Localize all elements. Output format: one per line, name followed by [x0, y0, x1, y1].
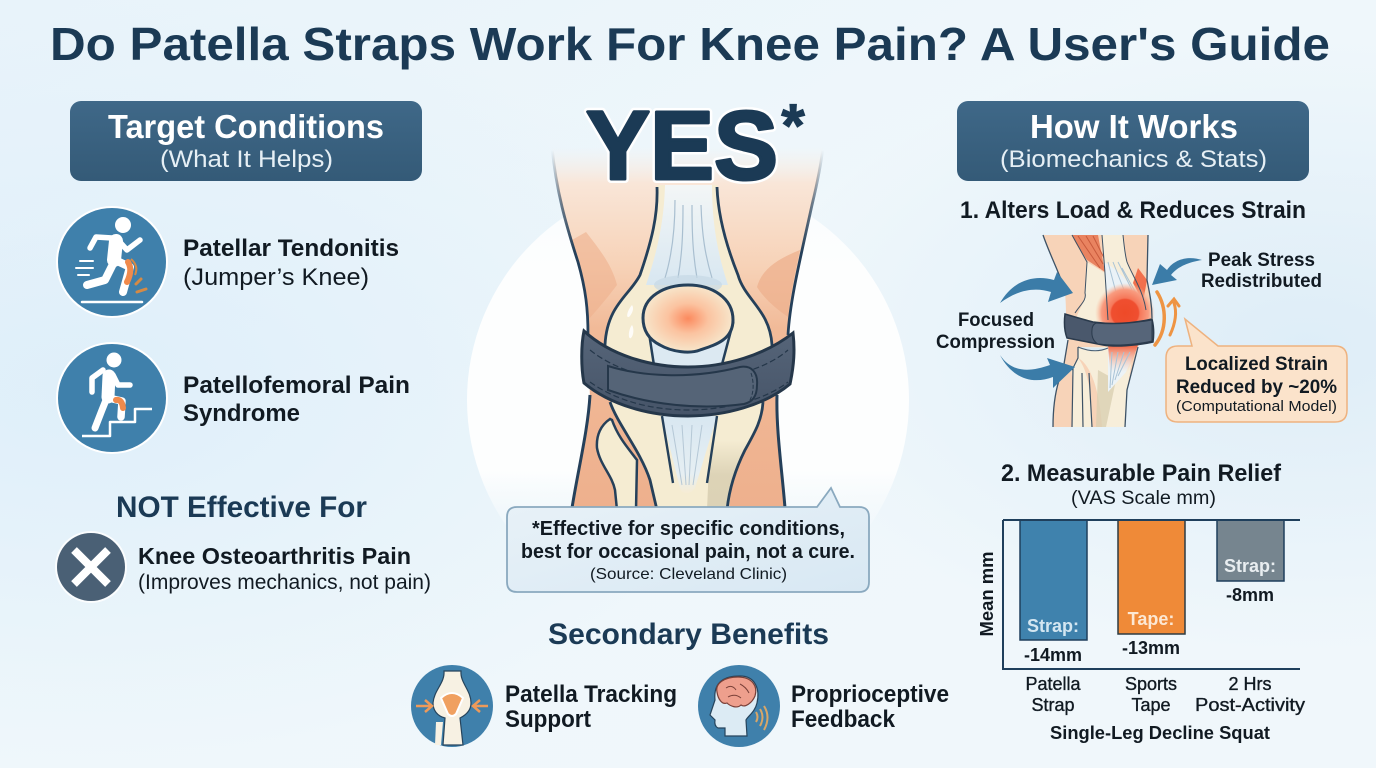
text: patellofemoral pain syndrome [183, 372, 410, 427]
patella [643, 285, 733, 352]
patellar tendon upper [647, 320, 733, 372]
text: patellar tendonitis: (Jumper’s Knee) [183, 264, 369, 291]
heading: secondary benefits: Secondary Benefits [548, 618, 829, 651]
panel: central knee illustration [467, 147, 909, 621]
axis label: Mean mm [977, 552, 997, 636]
text: patellar tendonitis [183, 235, 399, 291]
axis labels: Strap [1031, 695, 1075, 715]
label: focused compression: Compression [936, 332, 1055, 353]
text: patellofemoral pain syndrome: Patellofemoral Pain [183, 372, 410, 399]
bar chart [977, 520, 1305, 743]
bar: post activity: Strap: [1224, 556, 1276, 576]
axis labels: Patella [1025, 674, 1082, 694]
icon: x mark [55, 531, 127, 603]
bar: patella strap: -14mm [1024, 645, 1082, 665]
callout: effectiveness note: best for occasional pain, not a cure. [521, 541, 855, 563]
axis labels [1025, 674, 1305, 715]
yes heading: YES [586, 91, 778, 200]
bar: post activity [1217, 520, 1284, 605]
arrow: upper compression [1000, 272, 1073, 303]
heading: alters load: 1. Alters Load & Reduces Strain [960, 197, 1306, 224]
panel: target conditions [55, 101, 431, 603]
text: knee osteoarthritis pain: (Improves mechanics, not pain) [138, 571, 431, 594]
bar: sports tape: -13mm [1122, 638, 1180, 658]
callout: effectiveness note: (Source: Cleveland Clinic) [590, 566, 787, 583]
label: focused compression [936, 310, 1055, 353]
callout: localized strain [1166, 319, 1347, 422]
yes heading: YES [586, 91, 778, 200]
heading: how it works: (Biomechanics & Stats) [1000, 146, 1267, 173]
highlights [627, 305, 633, 338]
bar: patella strap: Strap: [1027, 616, 1079, 636]
label: focused compression: Focused [958, 310, 1034, 331]
heading: measurable pain relief: (VAS Scale mm) [1071, 488, 1216, 509]
text: proprioceptive feedback [791, 681, 949, 733]
side knee illustration [1043, 235, 1155, 427]
text: patellar tendonitis: Patellar Tendonitis [183, 235, 399, 262]
heading: target conditions [70, 101, 422, 181]
chart caption: Single-Leg Decline Squat [1050, 723, 1270, 743]
text: patella tracking support: Patella Tracking [505, 681, 677, 708]
heading: target conditions: Target Conditions [108, 108, 384, 145]
title: Do Patella Straps Work For Knee Pain? A User's Guide [50, 18, 1330, 70]
callout: effectiveness note: *Effective for specific conditions, [532, 518, 845, 540]
panel: how it works [936, 101, 1347, 743]
text: proprioceptive feedback: Feedback [791, 706, 896, 733]
label: peak stress: Peak Stress [1208, 250, 1315, 271]
callout: localized strain: Localized Strain [1185, 354, 1328, 375]
femur [605, 185, 772, 372]
leg skin [552, 147, 823, 510]
bar: post activity: -8mm [1226, 585, 1274, 605]
quadriceps tendon [646, 185, 728, 285]
arrow: peak stress [1152, 258, 1202, 285]
callout: localized strain: Reduced by ~20% [1176, 377, 1337, 398]
label: peak stress [1201, 250, 1322, 292]
text: patella tracking support [505, 681, 677, 733]
axis labels: Tape [1131, 695, 1171, 715]
panel: secondary benefits [411, 618, 949, 747]
text: knee osteoarthritis pain: Knee Osteoarthritis Pain [138, 543, 411, 569]
text: patellofemoral pain syndrome: Syndrome [183, 400, 300, 427]
heading: not effective for: NOT Effective For [116, 491, 367, 524]
heading: measurable pain relief [1001, 460, 1282, 509]
callout: localized strain: (Computational Model) [1176, 398, 1337, 415]
axis labels: Sports [1125, 674, 1177, 694]
icon: stair climber [56, 342, 168, 454]
axis labels: 2 Hrs [1228, 674, 1272, 694]
yes heading: * [781, 92, 805, 159]
text: knee osteoarthritis pain [138, 543, 431, 594]
text: patella tracking support: Support [505, 706, 591, 733]
heading: target conditions: (What It Helps) [160, 146, 333, 173]
bar: patella strap [1020, 520, 1087, 665]
bar: sports tape: Tape: [1128, 609, 1174, 629]
label: peak stress: Redistributed [1201, 271, 1322, 292]
heading: how it works [957, 101, 1309, 181]
lower bones [610, 402, 763, 512]
text: proprioceptive feedback: Proprioceptive [791, 681, 949, 708]
heading: how it works: How It Works [1030, 108, 1238, 145]
strap [1064, 314, 1154, 346]
arrow: lower compression [1000, 355, 1075, 388]
icon: brain proprioception [698, 665, 780, 747]
callout: effectiveness note [507, 488, 869, 592]
arrows: orange strain [1155, 292, 1179, 345]
heading: measurable pain relief: 2. Measurable Pain Relief [1001, 460, 1282, 487]
knee strap [582, 331, 794, 416]
icon: runner with knee pain [56, 206, 168, 318]
icon: patella tracking [411, 665, 493, 747]
bar: sports tape [1118, 520, 1185, 658]
axis labels: Post-Activity [1195, 695, 1305, 715]
